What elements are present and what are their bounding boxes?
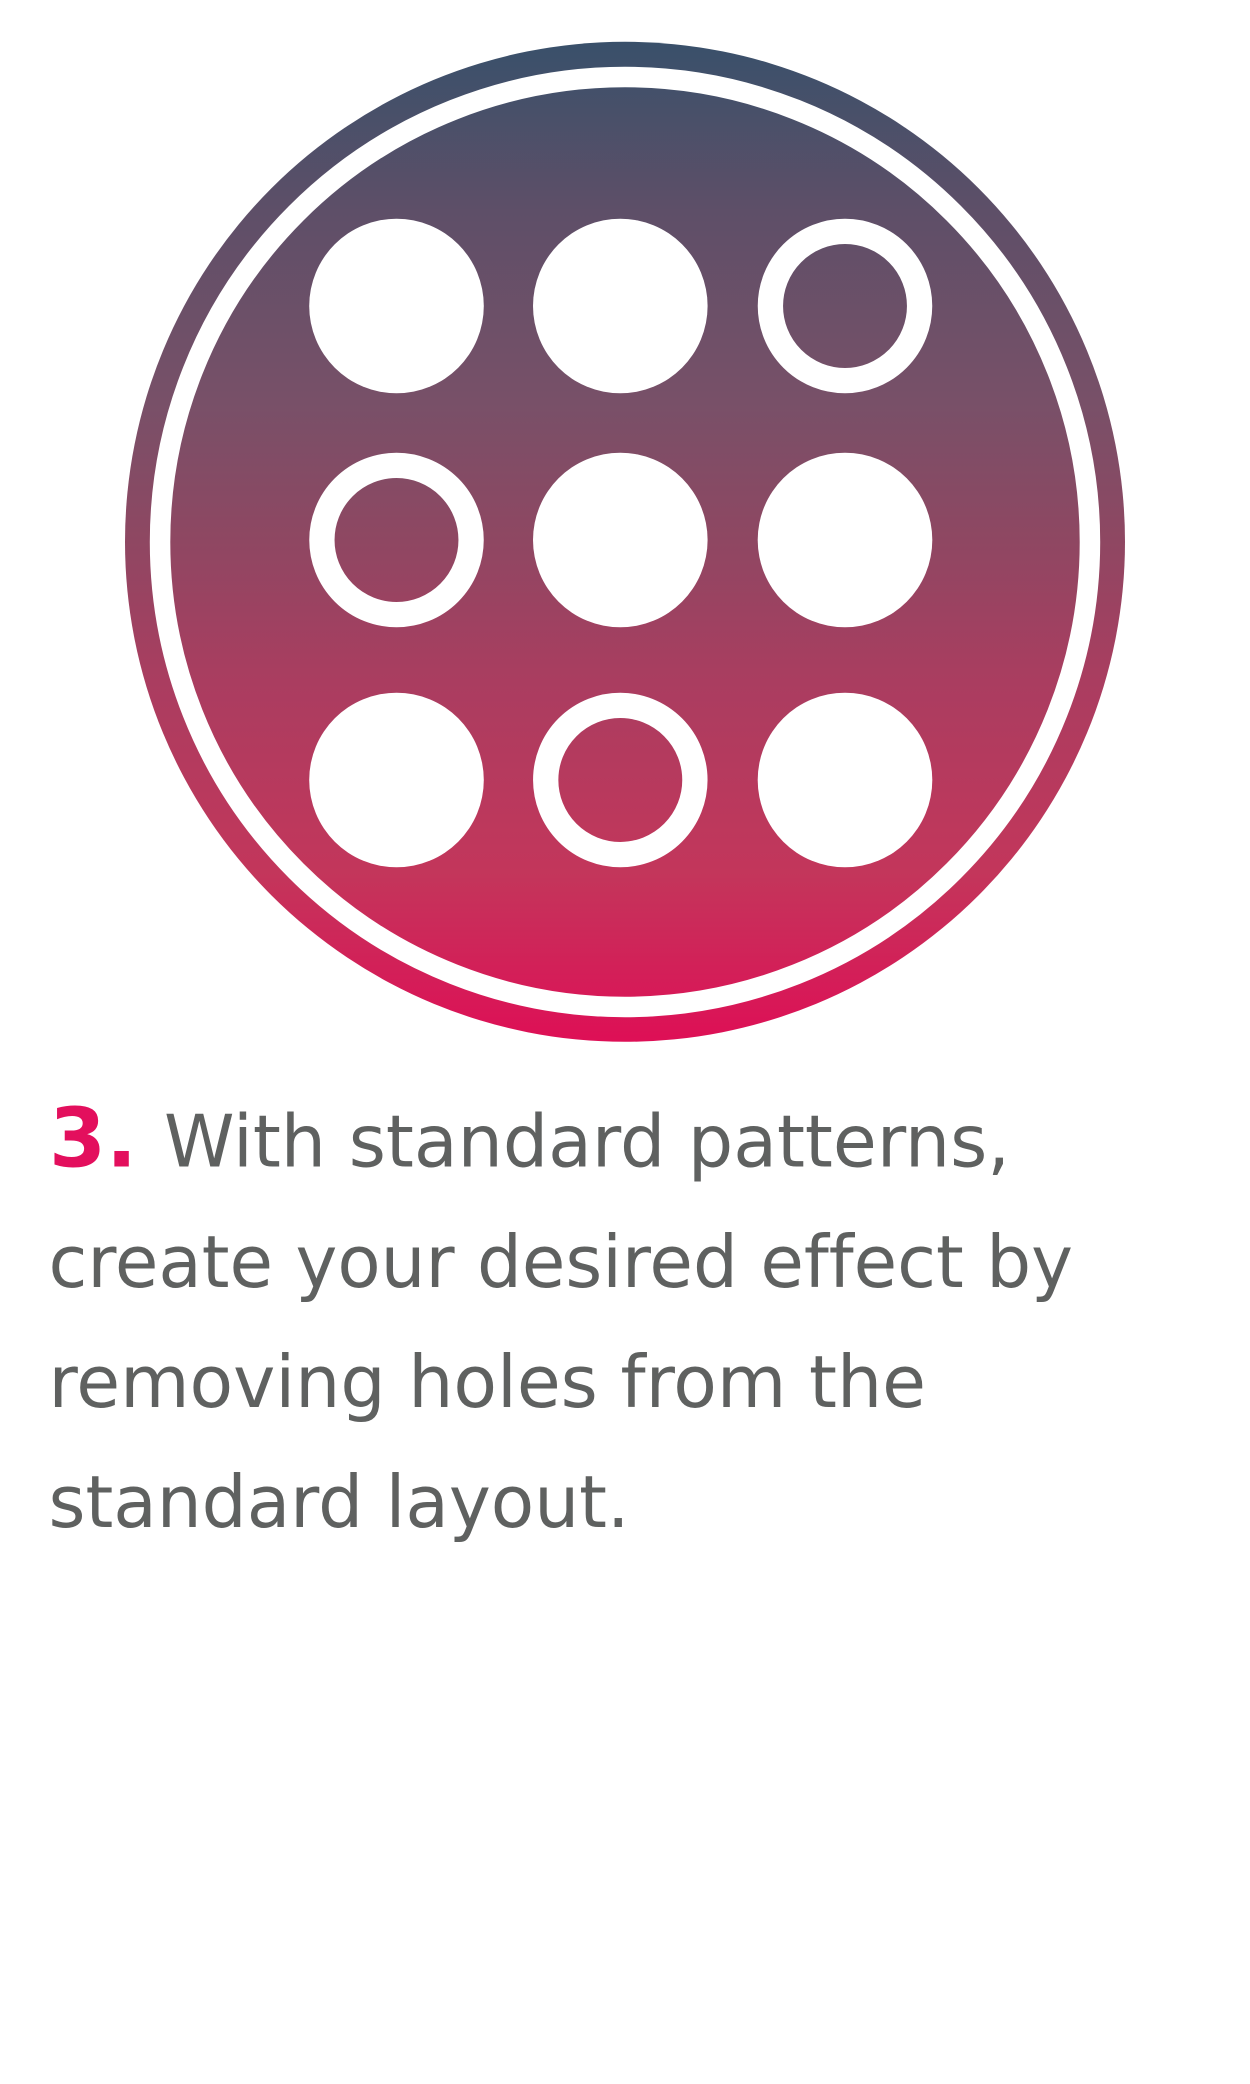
description text lines: create your desired effect by [48,1220,1073,1304]
icon: pattern disc with holes [125,42,1125,1042]
description text lines [48,1100,1073,1544]
step 3 description text [48,1092,1073,1544]
step number: 3. [49,1092,137,1186]
white inner ring [160,77,1090,1007]
description text lines: removing holes from the [48,1340,926,1424]
description text lines: standard layout. [48,1460,630,1544]
gradient disc [125,42,1125,1042]
hole pattern grid [309,219,932,867]
description text lines: With standard patterns, [164,1100,1010,1184]
